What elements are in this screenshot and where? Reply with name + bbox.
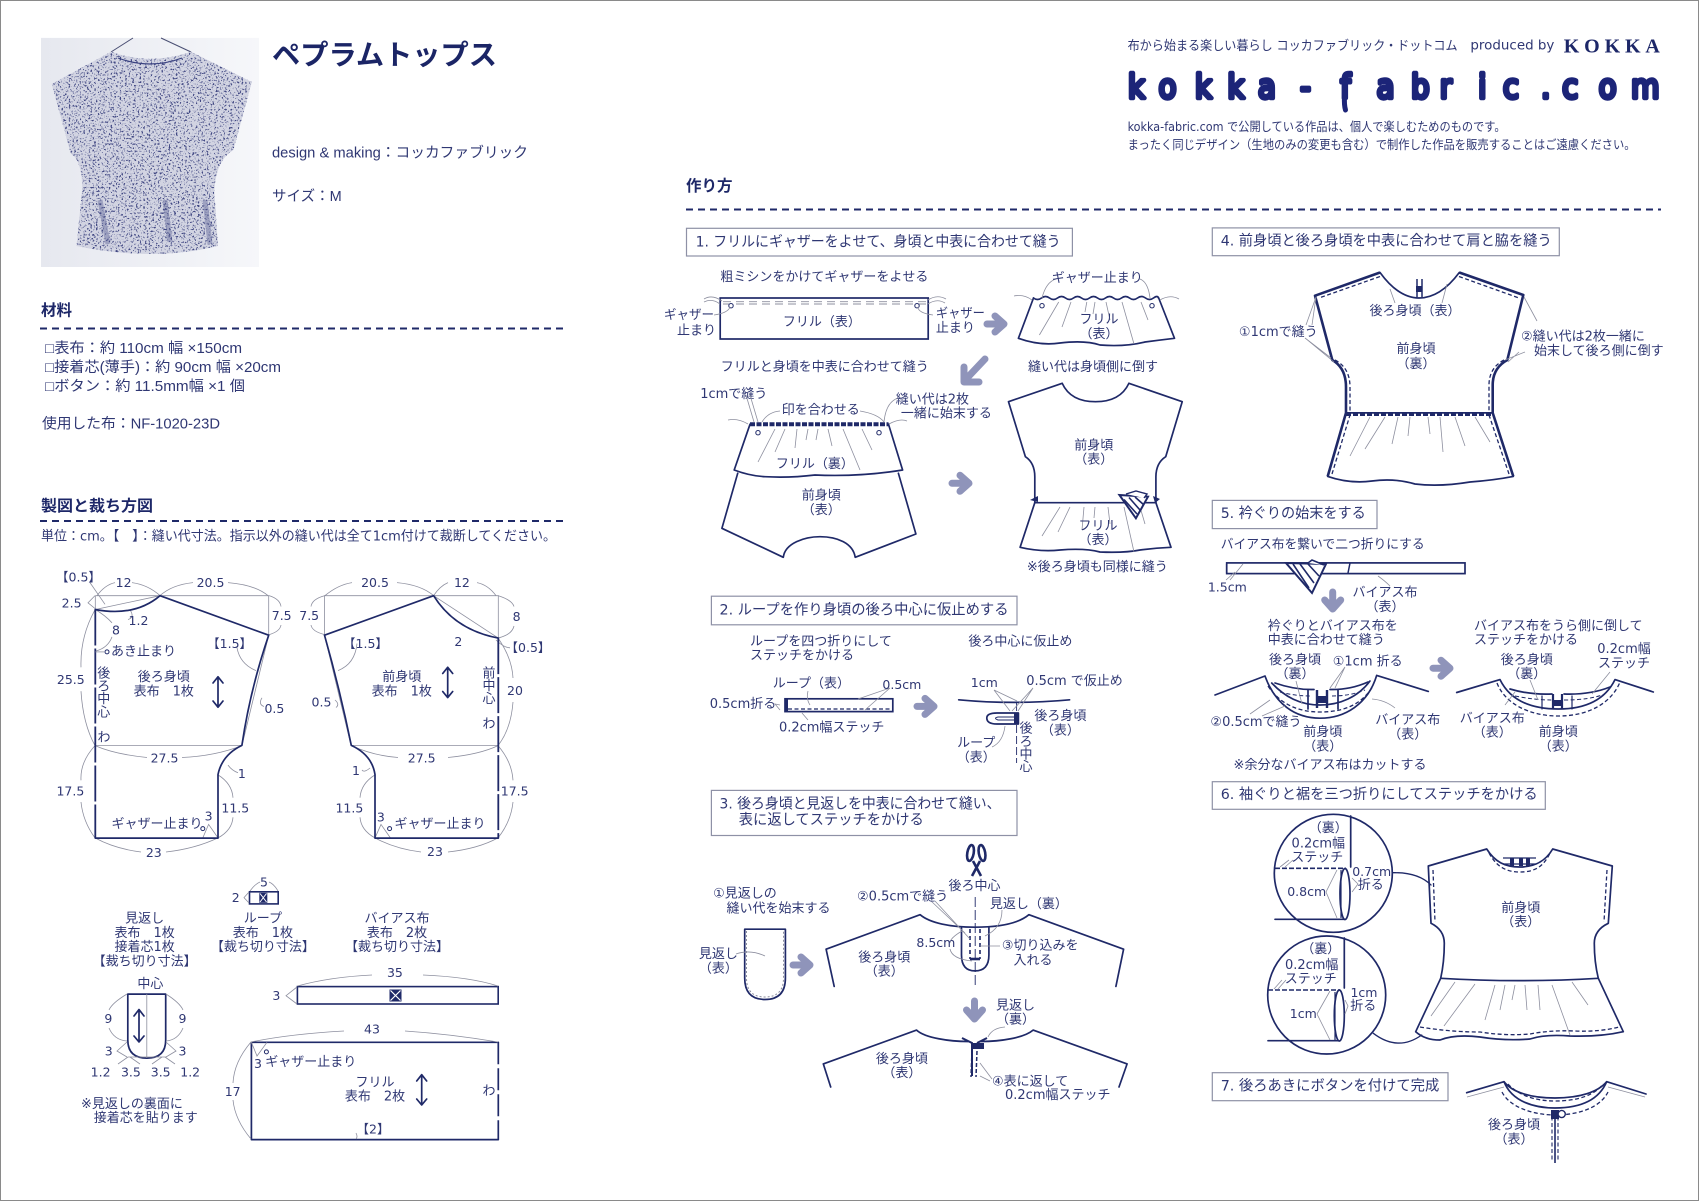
step 6 [1212, 782, 1623, 1054]
back bodice labels: 心 [97, 706, 110, 720]
frill on bodice: 印を合わせる [782, 403, 860, 418]
neck with bias, wrong side: （裏） [1275, 667, 1315, 682]
back bodice labels: 1 [238, 766, 246, 781]
neck with bias, wrong side: （表） [1303, 739, 1342, 754]
pattern: bias strip: 表布 2枚 [367, 926, 427, 941]
diagonal arrow [964, 359, 985, 382]
neck with bias, wrong side: ※余分なバイアス布はカットする [1234, 758, 1426, 773]
pattern: facing piece: 中心 [137, 977, 163, 992]
front bodice labels: 17.5 [501, 784, 529, 799]
front bodice labels: 【1.5】 [343, 636, 388, 651]
step 7 title [1212, 1073, 1448, 1101]
loop strip: 0.5cm折る [710, 697, 776, 712]
step 2: ループを四つ折りにして [750, 634, 892, 650]
pattern: loop piece: 5 [260, 874, 268, 889]
materials list: □ボタン：約 11.5mm幅 ×1 個 [45, 378, 245, 395]
front bodice labels: 前 [482, 665, 496, 681]
inside-out garment: 始末して後ろ側に倒す [1534, 344, 1664, 359]
pattern: frill piece: ギャザー止まり [265, 1055, 356, 1070]
arrow right [1433, 660, 1450, 676]
connector lines [1373, 873, 1431, 1043]
loop strip: 0.2cm幅ステッチ [779, 721, 884, 736]
step 1 title [686, 228, 1072, 256]
back bodice labels: 27.5 [151, 750, 178, 765]
pattern: facing piece: 【裁ち切り寸法】 [93, 954, 197, 970]
step 2 title [711, 596, 1017, 625]
neck with bias, wrong side: 前身頃 [1303, 724, 1342, 740]
detail circle: hem: 1cm [1350, 985, 1378, 1000]
bias strip [1208, 560, 1465, 615]
icon: iron [1286, 560, 1326, 593]
neck with bias folded: （表） [1473, 726, 1512, 741]
back neck with button: 後ろ身頃 [1488, 1117, 1540, 1133]
front bodice labels: 1 [352, 763, 360, 778]
pattern: facing piece: 接着芯1枚 [114, 939, 175, 955]
step 1 [664, 228, 1182, 575]
front bodice labels: 8 [513, 609, 521, 624]
neck with bias folded [1457, 642, 1653, 754]
step 5: バイアス布をうら側に倒して [1474, 619, 1643, 634]
step 6 title [1212, 782, 1545, 809]
pattern: facing piece [81, 911, 200, 1126]
arrow down [966, 1001, 982, 1019]
step 3 title [711, 790, 1017, 836]
pattern: frill piece: 17 [225, 1084, 241, 1099]
front bodice labels: 11.5 [335, 800, 363, 815]
front bodice labels: ギャザー止まり [394, 817, 486, 832]
neck with bias folded: 0.2cm幅 [1597, 642, 1651, 657]
step 4 title: 4. 前身頃と後ろ身頃を中表に合わせて肩と脇を縫う [1221, 232, 1552, 249]
back bodice labels: 20.5 [197, 575, 224, 590]
finished front with frill: （表） [1078, 533, 1118, 548]
pattern section [40, 496, 567, 544]
step 4 [1212, 228, 1664, 485]
materials list [45, 340, 281, 395]
pattern: back bodice [56, 570, 292, 860]
back bodice labels: 2.5 [62, 595, 82, 610]
facing stitched on back neck: 入れる [1013, 954, 1053, 969]
back bodice labels: 中 [97, 692, 110, 707]
title: ペプラムトップス [272, 38, 497, 72]
loop strip [710, 676, 921, 736]
inside-out garment: ①1cmで縫う [1239, 325, 1318, 340]
gathered frill: ギャザー止まり [1052, 271, 1143, 286]
inside-out garment: 後ろ身頃（表） [1369, 303, 1461, 319]
icon: scissors [966, 845, 987, 876]
back neck with button [1467, 1082, 1646, 1163]
brand header [1128, 36, 1660, 152]
step 1: ※後ろ身頃も同様に縫う [1027, 559, 1168, 575]
step 2: 後ろ中心に仮止め [968, 634, 1072, 650]
pattern: facing piece: 1.2 [180, 1065, 200, 1080]
back bodice labels [56, 570, 292, 860]
front bodice labels: 前身頃 [382, 669, 421, 685]
front bodice labels: 2 [454, 634, 462, 649]
facing overcast: 見返し [699, 947, 738, 962]
unit note: 単位：cm。【 】：縫い代寸法。指示以外の縫い代は全て1cm付けて裁断してください。 [41, 528, 556, 544]
back bodice labels: 8 [112, 622, 120, 637]
turned facing: 後ろ身頃 [876, 1051, 928, 1067]
neck with bias folded: （裏） [1507, 667, 1546, 682]
icon: iron [1119, 491, 1148, 518]
materials list: □表布：約 110cm 幅 ×150cm [45, 340, 242, 357]
gathered frill [1014, 271, 1179, 346]
front bodice labels [299, 575, 550, 859]
turned facing: （表） [882, 1066, 921, 1081]
step 2: ステッチをかける [750, 649, 854, 664]
arrow down [1325, 592, 1341, 609]
pattern: bias strip: 3 [272, 988, 280, 1003]
facing overcast [699, 886, 831, 1000]
front bodice labels: 23 [427, 844, 443, 859]
pattern: frill piece: 表布 2枚 [345, 1090, 405, 1105]
front bodice labels: 3 [377, 810, 385, 824]
neck with bias folded: 後ろ身頃 [1501, 652, 1553, 668]
finished garment front: （表） [1501, 915, 1540, 930]
turned facing: 見返し [996, 998, 1035, 1014]
detail circle: sleeve: 0.2cm幅 [1292, 836, 1345, 852]
arrow right [987, 316, 1004, 332]
frill on bodice: 1cmで縫う [700, 387, 767, 402]
pattern: facing piece: 3 [105, 1044, 113, 1058]
loop basted: 中 [1019, 748, 1033, 762]
finished front with frill [1008, 383, 1182, 552]
front bodice labels: 心 [482, 692, 496, 707]
neck with bias, wrong side: ①1cm 折る [1333, 655, 1403, 670]
pattern: front bodice [299, 575, 550, 859]
neck with bias, wrong side: ②0.5cmで縫う [1210, 715, 1302, 730]
step 5: ステッチをかける [1474, 633, 1578, 648]
pattern: facing piece: 表布 1枚 [114, 926, 175, 941]
flat frill: ギャザー [664, 308, 714, 323]
back bodice labels: わ [97, 730, 111, 745]
pattern: facing piece: 接着芯を貼ります [94, 1110, 198, 1126]
bias strip: （表） [1365, 600, 1405, 615]
flat frill: 止まり [677, 324, 716, 338]
back bodice labels: 後ろ身頃 [138, 669, 190, 685]
inside-out garment: 前身頃 [1396, 341, 1436, 357]
step 1 title: 1. フリルにギャザーをよせて、身頃と中表に合わせて縫う [696, 233, 1061, 250]
detail circle: sleeve: 折る [1358, 878, 1384, 893]
detail circle: hem: （裏） [1301, 942, 1340, 957]
pattern: loop piece: 表布 1枚 [233, 926, 293, 941]
loop basted: 後ろ身頃 [1034, 708, 1086, 724]
pattern: facing piece: 9 [179, 1011, 187, 1026]
neck with bias, wrong side: バイアス布 [1375, 713, 1440, 728]
front bodice labels: 0.5 [312, 694, 331, 709]
detail circle: sleeve: ステッチ [1291, 850, 1343, 866]
credit: design & making：コッカファブリック [272, 144, 528, 162]
back bodice labels: 3 [205, 809, 213, 824]
neck with bias folded: 前身頃 [1539, 724, 1578, 740]
neck with bias, wrong side [1210, 652, 1440, 773]
pattern: bias strip: 【裁ち切り寸法】 [345, 939, 449, 955]
front bodice labels: 12 [454, 575, 470, 590]
size: サイズ：M [272, 188, 342, 205]
detail circle: sleeve: （裏） [1309, 821, 1348, 836]
back bodice labels: 7.5 [272, 608, 292, 623]
facing stitched on back neck: （表） [865, 964, 904, 979]
pattern: loop piece: 【裁ち切り寸法】 [211, 939, 315, 955]
detail circle: sleeve: 0.7cm [1352, 864, 1391, 879]
neck with bias folded: バイアス布 [1460, 711, 1525, 726]
loop basted [957, 674, 1123, 775]
back bodice labels: 25.5 [57, 672, 85, 687]
step 1: 粗ミシンをかけてギャザーをよせる [720, 270, 928, 285]
front bodice labels: 7.5 [299, 608, 319, 623]
finished front with frill: フリル [1078, 519, 1118, 534]
flat frill [664, 297, 985, 339]
pattern: loop piece: ループ [244, 911, 282, 926]
turned facing: （裏） [996, 1013, 1035, 1028]
step 5: バイアス布を繋いで二つ折りにする [1221, 536, 1425, 552]
front bodice labels: 【0.5】 [506, 640, 550, 655]
loop basted: 心 [1019, 760, 1033, 775]
front bodice labels: 27.5 [408, 750, 436, 765]
pattern: facing piece: 3.5 [151, 1065, 171, 1080]
facing stitched on back neck [826, 889, 1124, 988]
back bodice labels: ろ [97, 680, 110, 695]
materials heading: 材料 [41, 300, 73, 320]
step 3 title: 3. 後ろ身頃と見返しを中表に合わせて縫い、 [720, 796, 1000, 812]
pattern: frill piece: わ [482, 1084, 496, 1099]
arrow right [793, 957, 810, 973]
gathered frill: フリル [1079, 312, 1119, 328]
arrow right [917, 698, 934, 714]
grainline arrow [213, 677, 223, 707]
step 7 [1212, 1073, 1646, 1163]
frill on bodice: 一緒に始末する [901, 406, 992, 422]
facing stitched on back neck: 見返し（裏） [990, 897, 1068, 912]
back bodice labels: 1.2 [129, 613, 148, 628]
detail circle: hem: 1cm [1290, 1006, 1317, 1021]
back neck with button: （表） [1494, 1132, 1534, 1148]
back bodice labels: 11.5 [221, 800, 249, 815]
pattern heading: 製図と裁ち方図 [41, 496, 153, 515]
pattern: frill piece: 43 [364, 1022, 380, 1036]
produced by: produced by [1470, 38, 1555, 54]
step 1: 縫い代は身頃側に倒す [1028, 359, 1158, 375]
pattern: facing piece: ※見返しの裏面に [81, 1097, 183, 1112]
neck with bias, wrong side: 後ろ身頃 [1269, 652, 1321, 668]
flat frill: ギャザー [936, 306, 985, 322]
pattern: frill piece [225, 1022, 498, 1140]
inside-out garment: ②縫い代は2枚一緒に [1521, 329, 1645, 344]
usage notice: kokka-fabric.com で公開している作品は、個人で楽しむためのものです。 [1128, 119, 1506, 134]
pattern: facing piece: 9 [104, 1011, 112, 1026]
KOKKA wordmark: KOKKA [1564, 36, 1660, 58]
fabric used: 使用した布：NF-1020-23D [42, 415, 220, 432]
facing stitched on back neck: ②0.5cmで縫う [857, 889, 948, 904]
loop basted: 1cm [971, 675, 998, 690]
loop basted: ろ [1019, 735, 1033, 750]
turned facing: 0.2cm幅ステッチ [1005, 1088, 1110, 1103]
loop basted: 後 [1019, 722, 1033, 737]
materials list: □接着芯(薄手)：約 90cm 幅 ×20cm [45, 359, 281, 376]
step 5: 中表に合わせて縫う [1268, 633, 1385, 648]
gathered frill: （表） [1079, 327, 1119, 342]
step 6 title: 6. 袖ぐりと裾を三つ折りにしてステッチをかける [1221, 786, 1538, 803]
step 5 title: 5. 衿ぐりの始末をする [1221, 505, 1366, 522]
front bodice labels: 表布 1枚 [372, 685, 432, 700]
photo: finished peplum top [41, 38, 259, 267]
pattern: facing piece: 見返し [125, 911, 164, 926]
flat frill: 止まり [936, 321, 975, 336]
detail circle: sleeve [1274, 814, 1392, 932]
loop basted: （表） [957, 750, 996, 766]
frill on bodice: （表） [802, 503, 841, 518]
facing stitched on back neck: 8.5cm [916, 935, 955, 950]
back bodice labels: ギャザー止まり [111, 817, 203, 832]
front bodice labels: 20 [507, 683, 523, 698]
neck with bias folded: ステッチ [1598, 656, 1650, 671]
step 1: フリルと身頃を中表に合わせて縫う [721, 359, 929, 375]
front bodice labels: 20.5 [361, 575, 389, 590]
turned facing: ④表に返して [992, 1074, 1068, 1089]
pattern: facing piece: 3.5 [121, 1065, 141, 1080]
pattern: bias strip [272, 911, 498, 1004]
neck with bias, wrong side: （表） [1388, 728, 1427, 742]
pattern: facing piece: 1.2 [91, 1065, 111, 1080]
step 3 [699, 790, 1127, 1103]
facing overcast: 縫い代を始末する [726, 902, 831, 917]
step 2 title: 2. ループを作り身頃の後ろ中心に仮止めする [720, 601, 1008, 618]
neck with bias folded: （表） [1539, 739, 1578, 754]
pattern: bias strip: バイアス布 [364, 911, 430, 926]
back bodice labels: 23 [146, 845, 162, 860]
bias strip: 1.5cm [1208, 579, 1247, 594]
detail circle: hem: ステッチ [1285, 972, 1337, 987]
pattern: bias strip: 35 [387, 965, 403, 980]
back bodice labels: 0.5 [264, 701, 284, 716]
pattern: frill piece: 【2】 [357, 1121, 389, 1136]
grainline arrow [443, 667, 453, 698]
inside-out garment [1239, 272, 1664, 485]
pattern: facing piece: 3 [179, 1044, 186, 1058]
detail circle: hem: 0.2cm幅 [1285, 958, 1338, 973]
inside-out garment: （裏） [1396, 357, 1436, 372]
back bodice labels: あき止まり [111, 644, 176, 659]
step 5 title [1212, 500, 1377, 529]
frill on bodice: フリル（裏） [776, 457, 854, 472]
back bodice labels: 後 [97, 666, 110, 681]
back bodice labels: 【1.5】 [207, 636, 252, 651]
finished front with frill: （表） [1074, 452, 1113, 468]
step 5 [1208, 500, 1653, 773]
facing stitched on back neck: ③切り込みを [1002, 939, 1079, 954]
back bodice labels: 【0.5】 [56, 570, 101, 584]
loop strip: ループ（表） [773, 676, 850, 692]
pattern: loop piece: 2 [232, 890, 240, 905]
pattern: frill piece: 3 [254, 1056, 262, 1071]
frill on bodice: 縫い代は2枚 [896, 392, 969, 408]
frill on bodice [700, 387, 992, 557]
detail circle: hem [1268, 936, 1386, 1054]
step 2 [710, 596, 1123, 775]
loop basted: （表） [1041, 723, 1080, 738]
loop basted: ループ [957, 736, 995, 751]
detail circle: hem: 折る [1350, 999, 1376, 1014]
front bodice labels: 中 [482, 679, 496, 694]
kokka-fabric.com logo: kokka-fabric.com [1128, 68, 1659, 106]
bias strip: バイアス布 [1352, 586, 1418, 601]
finished front with frill: 前身頃 [1074, 438, 1113, 454]
loop basted: 0.5cm で仮止め [1026, 674, 1123, 689]
frill on bodice: 前身頃 [802, 488, 841, 504]
detail circle: sleeve: 0.8cm [1287, 884, 1326, 899]
how-to heading: 作り方 [686, 176, 733, 195]
facing overcast: ①見返しの [713, 886, 777, 902]
facing overcast: （表） [699, 962, 738, 977]
facing stitched on back neck: 後ろ身頃 [858, 949, 910, 965]
usage notice [1128, 119, 1636, 152]
finished garment front: 前身頃 [1501, 900, 1540, 916]
back bodice labels: 17.5 [56, 784, 84, 799]
tagline: 布から始まる楽しい暮らし コッカファブリック・ドットコム [1128, 38, 1458, 54]
flat frill: フリル（表） [783, 315, 861, 330]
step 3 title: 表に返してステッチをかける [739, 812, 924, 829]
usage notice: まったく同じデザイン（生地のみの変更も含む）で制作した作品を販売することはご遠慮ください。 [1128, 137, 1636, 152]
finished garment front [1416, 849, 1623, 1040]
back bodice labels: 表布 1枚 [134, 685, 194, 700]
materials section [40, 300, 567, 432]
step 3: 後ろ中心 [948, 879, 1001, 894]
turned facing [823, 998, 1127, 1103]
pattern: loop piece [211, 874, 315, 955]
arrow right [952, 475, 969, 491]
pattern: frill piece: フリル [355, 1076, 395, 1090]
front bodice labels: わ [482, 717, 496, 732]
step 5: 衿ぐりとバイアス布を [1268, 619, 1398, 634]
back bodice labels: 12 [116, 575, 132, 590]
step 7 title: 7. 後ろあきにボタンを付けて完成 [1221, 1078, 1439, 1095]
loop strip: 0.5cm [882, 677, 921, 692]
step 4 title [1212, 228, 1559, 256]
